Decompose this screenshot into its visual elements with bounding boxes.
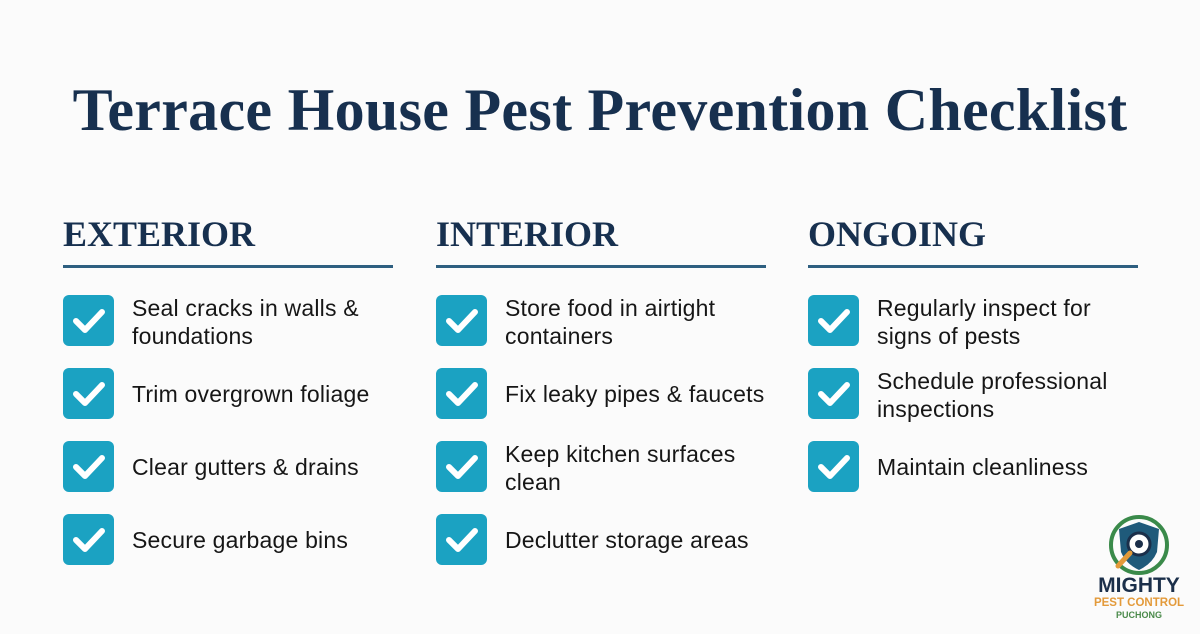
item: seal cracks xyxy=(63,295,359,349)
panel: interior xyxy=(436,214,766,565)
item: garbage bins xyxy=(63,514,348,565)
item: professional: inspections xyxy=(877,396,994,422)
item: seal cracks: foundations xyxy=(132,323,253,349)
item: fix pipes: Fix leaky pipes & faucets xyxy=(505,381,764,407)
panel: exterior xyxy=(63,214,393,565)
item: cleanliness: Maintain cleanliness xyxy=(877,454,1088,480)
logo: PUCHONG xyxy=(1116,610,1162,620)
item: fix pipes xyxy=(436,368,764,419)
heading: interior: INTERIOR xyxy=(436,214,618,254)
item: kitchen xyxy=(436,441,736,495)
item: store food: Store food in airtight xyxy=(505,295,715,321)
item: cleanliness xyxy=(808,441,1088,492)
heading: ongoing: ONGOING xyxy=(808,214,986,254)
panel: ongoing xyxy=(808,214,1138,492)
item: declutter xyxy=(436,514,749,565)
logo xyxy=(1094,515,1184,620)
logo: MIGHTY xyxy=(1098,574,1180,597)
item: trim foliage xyxy=(63,368,369,419)
item: store food xyxy=(436,295,715,349)
item: inspect xyxy=(808,295,1091,349)
item: store food: containers xyxy=(505,323,613,349)
item: inspect: Regularly inspect for xyxy=(877,295,1091,321)
heading: exterior: EXTERIOR xyxy=(63,214,255,254)
item: professional: Schedule professional xyxy=(877,368,1108,394)
title: Terrace House Pest Prevention Checklist xyxy=(73,77,1127,143)
logo: PEST CONTROL xyxy=(1094,597,1184,609)
item: gutters: Clear gutters & drains xyxy=(132,454,359,480)
item: declutter: Declutter storage areas xyxy=(505,527,749,553)
item: inspect: signs of pests xyxy=(877,323,1020,349)
item: kitchen: clean xyxy=(505,469,561,495)
item: trim foliage: Trim overgrown foliage xyxy=(132,381,369,407)
item: gutters xyxy=(63,441,359,492)
item: professional xyxy=(808,368,1108,422)
item: kitchen: Keep kitchen surfaces xyxy=(505,441,736,467)
item: seal cracks: Seal cracks in walls & xyxy=(132,295,359,321)
item: garbage bins: Secure garbage bins xyxy=(132,527,348,553)
